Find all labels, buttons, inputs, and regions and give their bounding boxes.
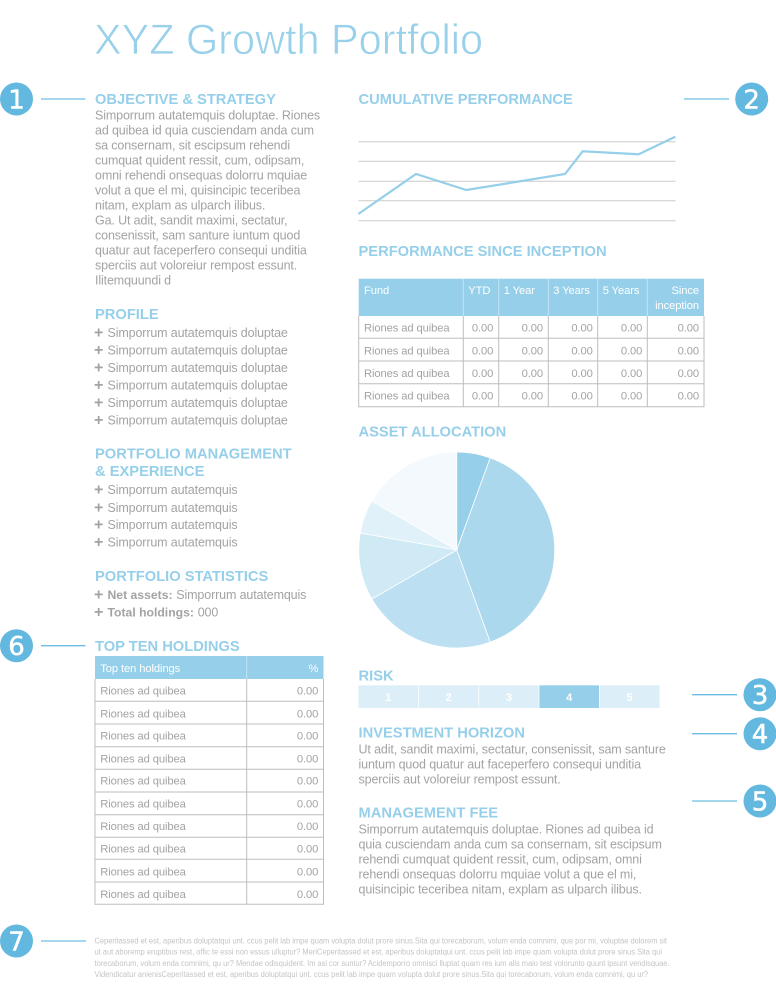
- callout 2: 2: [743, 86, 760, 116]
- callout 1: 1: [8, 86, 25, 116]
- panel: investment horizon: [358, 726, 666, 786]
- callout 3: 3: [752, 681, 768, 711]
- table: top ten holdings: 0.00: [297, 753, 318, 765]
- heading: management fee: MANAGEMENT FEE: [358, 806, 498, 822]
- text block: objective body: consenissit, sam santure iuntum quod: [95, 228, 300, 242]
- heading: portfolio management: [95, 447, 292, 480]
- heading: risk: RISK: [358, 668, 394, 684]
- risk scale: 4: [566, 692, 573, 704]
- title: XYZ Growth Portfolio: [94, 16, 483, 64]
- table: performance: 0.00: [621, 345, 642, 357]
- table: top ten holdings: 0.00: [297, 844, 318, 856]
- list: profile items: Simporrum autatemquis doluptae: [108, 344, 288, 358]
- callout 6: 6: [8, 632, 25, 662]
- risk scale: 2: [446, 692, 452, 704]
- table: performance: 0.00: [571, 391, 593, 403]
- panel: asset allocation: [358, 425, 555, 648]
- panel: profile: [94, 307, 288, 429]
- text block: footer disclaimer: Videndicatur anienisCeperitassed et est, aperibus doluptatqui unt. ccus pelit lab impe quam volupta dolut prore sinus.Sita qui torecaborum, volum enda comnimi, qu ur?: [94, 970, 649, 979]
- text block: management fee body: rehendi onsequas dolorru mquiae volut a que el mi,: [358, 868, 636, 882]
- table: performance: 0.00: [678, 391, 699, 403]
- list: profile items: +: [94, 324, 103, 342]
- table: top ten holdings: Riones ad quibea: [100, 753, 187, 765]
- list: profile items: Simporrum autatemquis doluptae: [108, 326, 288, 340]
- table: performance: [359, 279, 704, 407]
- list: management items: +: [94, 499, 103, 516]
- text block: objective body: quatur aut faceperfero consequi unditia: [95, 244, 307, 258]
- table: performance: Riones ad quibea: [364, 391, 450, 403]
- table: performance: 0.00: [621, 368, 642, 380]
- risk scale: 1: [385, 692, 391, 704]
- table: performance: 0.00: [621, 323, 642, 335]
- heading: portfolio management: & EXPERIENCE: [95, 464, 205, 480]
- text block: management fee body: quisincipic teceribea nitam, explam as ulparch ilibus.: [358, 882, 642, 896]
- text block: investment horizon body: [358, 742, 666, 786]
- heading: performance since inception: PERFORMANCE SINCE INCEPTION: [358, 244, 607, 260]
- panel: performance since inception: [358, 244, 704, 407]
- table: performance: 0.00: [472, 368, 493, 380]
- heading: top ten holdings: TOP TEN HOLDINGS: [95, 639, 240, 655]
- table: top ten holdings: 0.00: [297, 731, 318, 743]
- table: performance: Riones ad quibea: [364, 323, 450, 335]
- list: statistics items: [94, 586, 306, 621]
- panel: top ten holdings: [95, 639, 324, 904]
- table: performance: 0.00: [621, 391, 642, 403]
- list: management items: +: [94, 517, 103, 534]
- risk scale: 3: [506, 692, 512, 704]
- table: top ten holdings: 0.00: [297, 776, 318, 788]
- text block: footer disclaimer: ut aut aboremp eruptibus rest, offic te essi non essus ulluptur? MeriCeperitassed et est, aperibus doluptatqui unt. ccus pelit lab impe quam volupta dolut prore sinus.Sita qui: [94, 948, 662, 956]
- list: profile items: +: [94, 394, 103, 412]
- table: top ten holdings: Riones ad quibea: [100, 889, 187, 901]
- table: top ten holdings: 0.00: [297, 798, 318, 810]
- table: performance: 0.00: [678, 323, 699, 335]
- text block: management fee body: quia cusciendam anda cum sa consernam, sit escipsum: [358, 838, 662, 852]
- text block: objective body: Ilitemquundi d: [95, 274, 171, 288]
- table: performance: YTD: [468, 285, 490, 297]
- callout 7: 7: [8, 928, 25, 958]
- table: top ten holdings: Riones ad quibea: [100, 731, 187, 743]
- table: top ten holdings: 0.00: [297, 821, 318, 833]
- risk scale: 5: [627, 692, 633, 704]
- list: profile items: [94, 324, 288, 429]
- list: profile items: Simporrum autatemquis doluptae: [108, 361, 288, 375]
- callout 4: 4: [752, 720, 768, 750]
- text block: investment horizon body: Ut adit, sandit maximi, sectatur, consenissit, sam santure: [358, 742, 666, 756]
- list: profile items: Simporrum autatemquis doluptae: [108, 396, 288, 410]
- text block: management fee body: rehendi cumquat quident ressit, cum, odipsam, omni: [358, 852, 642, 866]
- table: performance: 0.00: [522, 345, 543, 357]
- table: performance: 0.00: [571, 368, 593, 380]
- panel: portfolio statistics: [94, 569, 306, 621]
- heading: investment horizon: INVESTMENT HORIZON: [358, 726, 525, 742]
- text block: objective body: Ga. Ut adit, sandit maximi, sectatur,: [95, 214, 288, 228]
- text block: footer disclaimer: torecaborum, volum enda comnimi, qu ur? Mendae odisquident. Im asi cor suntur? Acidemporro omnisci lluptat quam res ium alis maio test volorunto quunt ipsunt vendisquae.: [94, 959, 670, 968]
- heading: asset allocation: ASSET ALLOCATION: [358, 425, 506, 441]
- table: top ten holdings: Riones ad quibea: [100, 866, 187, 878]
- panel: management fee: [358, 806, 662, 896]
- list: management items: Simporrum autatemquis: [108, 536, 237, 550]
- list: statistics items: 000: [198, 606, 218, 620]
- table: top ten holdings: Riones ad quibea: [100, 708, 187, 720]
- text block: objective body: [95, 108, 320, 288]
- list: profile items: Simporrum autatemquis doluptae: [108, 414, 288, 428]
- callout 4: [692, 717, 776, 750]
- table: performance: 0.00: [522, 368, 543, 380]
- table: performance: 0.00: [678, 345, 699, 357]
- table: performance: 5 Years: [603, 285, 640, 297]
- text block: objective body: volut a que el mi, quisincipic teceribea: [95, 184, 301, 198]
- table: top ten holdings: Riones ad quibea: [100, 776, 187, 788]
- callout 2: [684, 82, 768, 116]
- heading: objective and strategy: OBJECTIVE & STRATEGY: [95, 92, 276, 108]
- list: profile items: +: [94, 412, 103, 429]
- list: management items: +: [94, 482, 103, 499]
- heading: profile: PROFILE: [95, 307, 159, 323]
- text block: objective body: Simporrum autatemquis doluptae. Riones: [95, 108, 320, 122]
- text block: objective body: ad quibea id quia cusciendam anda cum: [95, 124, 314, 138]
- table: performance: 0.00: [678, 368, 699, 380]
- list: management items: Simporrum autatemquis: [108, 501, 237, 515]
- heading: cumulative performance: CUMULATIVE PERFORMANCE: [358, 92, 573, 108]
- list: statistics items: +: [94, 604, 103, 621]
- table: performance: 0.00: [571, 345, 593, 357]
- list: management items: Simporrum autatemquis: [108, 483, 237, 497]
- text block: objective body: sa consernam, sit escipsum rehendi: [95, 138, 290, 152]
- list: management items: Simporrum autatemquis: [108, 518, 237, 532]
- table: top ten holdings: %: [308, 663, 318, 675]
- list: management items: [94, 482, 237, 551]
- table: performance: 0.00: [472, 323, 493, 335]
- text block: management fee body: [358, 822, 662, 896]
- table: performance: 0.00: [472, 345, 493, 357]
- table: top ten holdings: Riones ad quibea: [100, 798, 187, 810]
- table: top ten holdings: Riones ad quibea: [100, 686, 187, 698]
- callout 3: [692, 678, 776, 711]
- callout 5: 5: [752, 788, 768, 818]
- text block: investment horizon body: sperciis aut voloreiur rempost essunt.: [358, 772, 561, 786]
- table: performance: 0.00: [571, 323, 593, 335]
- table: top ten holdings: Riones ad quibea: [100, 821, 187, 833]
- list: statistics items: Total holdings:: [108, 606, 194, 620]
- callout 6: [0, 629, 86, 662]
- table: top ten holdings: 0.00: [297, 889, 318, 901]
- text block: objective body: cumquat quident ressit, cum, odipsam,: [95, 154, 304, 168]
- risk scale: [358, 685, 660, 708]
- text block: investment horizon body: iuntum quod quatur aut faceperfero consequi unditia: [358, 758, 641, 772]
- list: statistics items: +: [94, 586, 103, 603]
- text block: footer disclaimer: Ceperitassed et est, aperibus doluptatqui unt. ccus pelit lab impe quam volupta dolut prore sinus.Sita qui torecaborum, volum enda comnimi, que por mi, voluptae dolorem sit: [94, 936, 668, 945]
- panel: cumulative performance: [358, 92, 676, 221]
- list: profile items: +: [94, 377, 103, 394]
- table: performance: 3 Years: [553, 285, 590, 297]
- callout 7: [0, 924, 86, 958]
- text block: footer disclaimer: [94, 936, 670, 979]
- table: top ten holdings: 0.00: [297, 866, 318, 878]
- table: top ten holdings: 0.00: [297, 686, 318, 698]
- table: performance: 0.00: [522, 391, 543, 403]
- list: profile items: Simporrum autatemquis doluptae: [108, 378, 288, 392]
- table: performance: Since: [672, 285, 699, 297]
- heading: portfolio statistics: PORTFOLIO STATISTICS: [95, 569, 268, 585]
- table: top ten holdings: Riones ad quibea: [100, 844, 187, 856]
- table: performance: 1 Year: [504, 285, 535, 297]
- pie chart: asset allocation: [359, 452, 555, 648]
- heading: portfolio management: PORTFOLIO MANAGEMENT: [95, 447, 292, 463]
- text block: objective body: omni rehendi onsequas dolorru mquiae: [95, 168, 307, 182]
- text block: management fee body: Simporrum autatemquis doluptae. Riones ad quibea id: [358, 822, 654, 836]
- list: profile items: +: [94, 360, 103, 376]
- text block: objective body: nitam, explam as ulparch ilibus.: [95, 198, 265, 212]
- table: performance: 0.00: [472, 391, 493, 403]
- panel: risk: [358, 668, 660, 708]
- list: management items: +: [94, 534, 103, 551]
- table: performance: Fund: [364, 285, 389, 297]
- list: statistics items: Net assets:: [108, 588, 173, 602]
- line chart: cumulative performance: [358, 137, 676, 221]
- table: performance: 0.00: [522, 323, 543, 335]
- text block: objective body: sperciis aut voloreiur rempost essunt.: [95, 258, 297, 272]
- table: performance: Riones ad quibea: [364, 345, 450, 357]
- table: performance: inception: [655, 300, 699, 312]
- list: statistics items: Simporrum autatemquis: [176, 588, 306, 602]
- table: performance: Riones ad quibea: [364, 368, 450, 380]
- table: top ten holdings: Top ten holdings: [100, 663, 181, 675]
- callout 5: [692, 784, 776, 818]
- list: profile items: +: [94, 342, 103, 359]
- panel: objective and strategy: [95, 92, 320, 288]
- table: top ten holdings: 0.00: [297, 708, 318, 720]
- panel: portfolio management and experience: [94, 447, 292, 551]
- callout 1: [0, 82, 86, 116]
- table: top ten holdings: [95, 656, 324, 904]
